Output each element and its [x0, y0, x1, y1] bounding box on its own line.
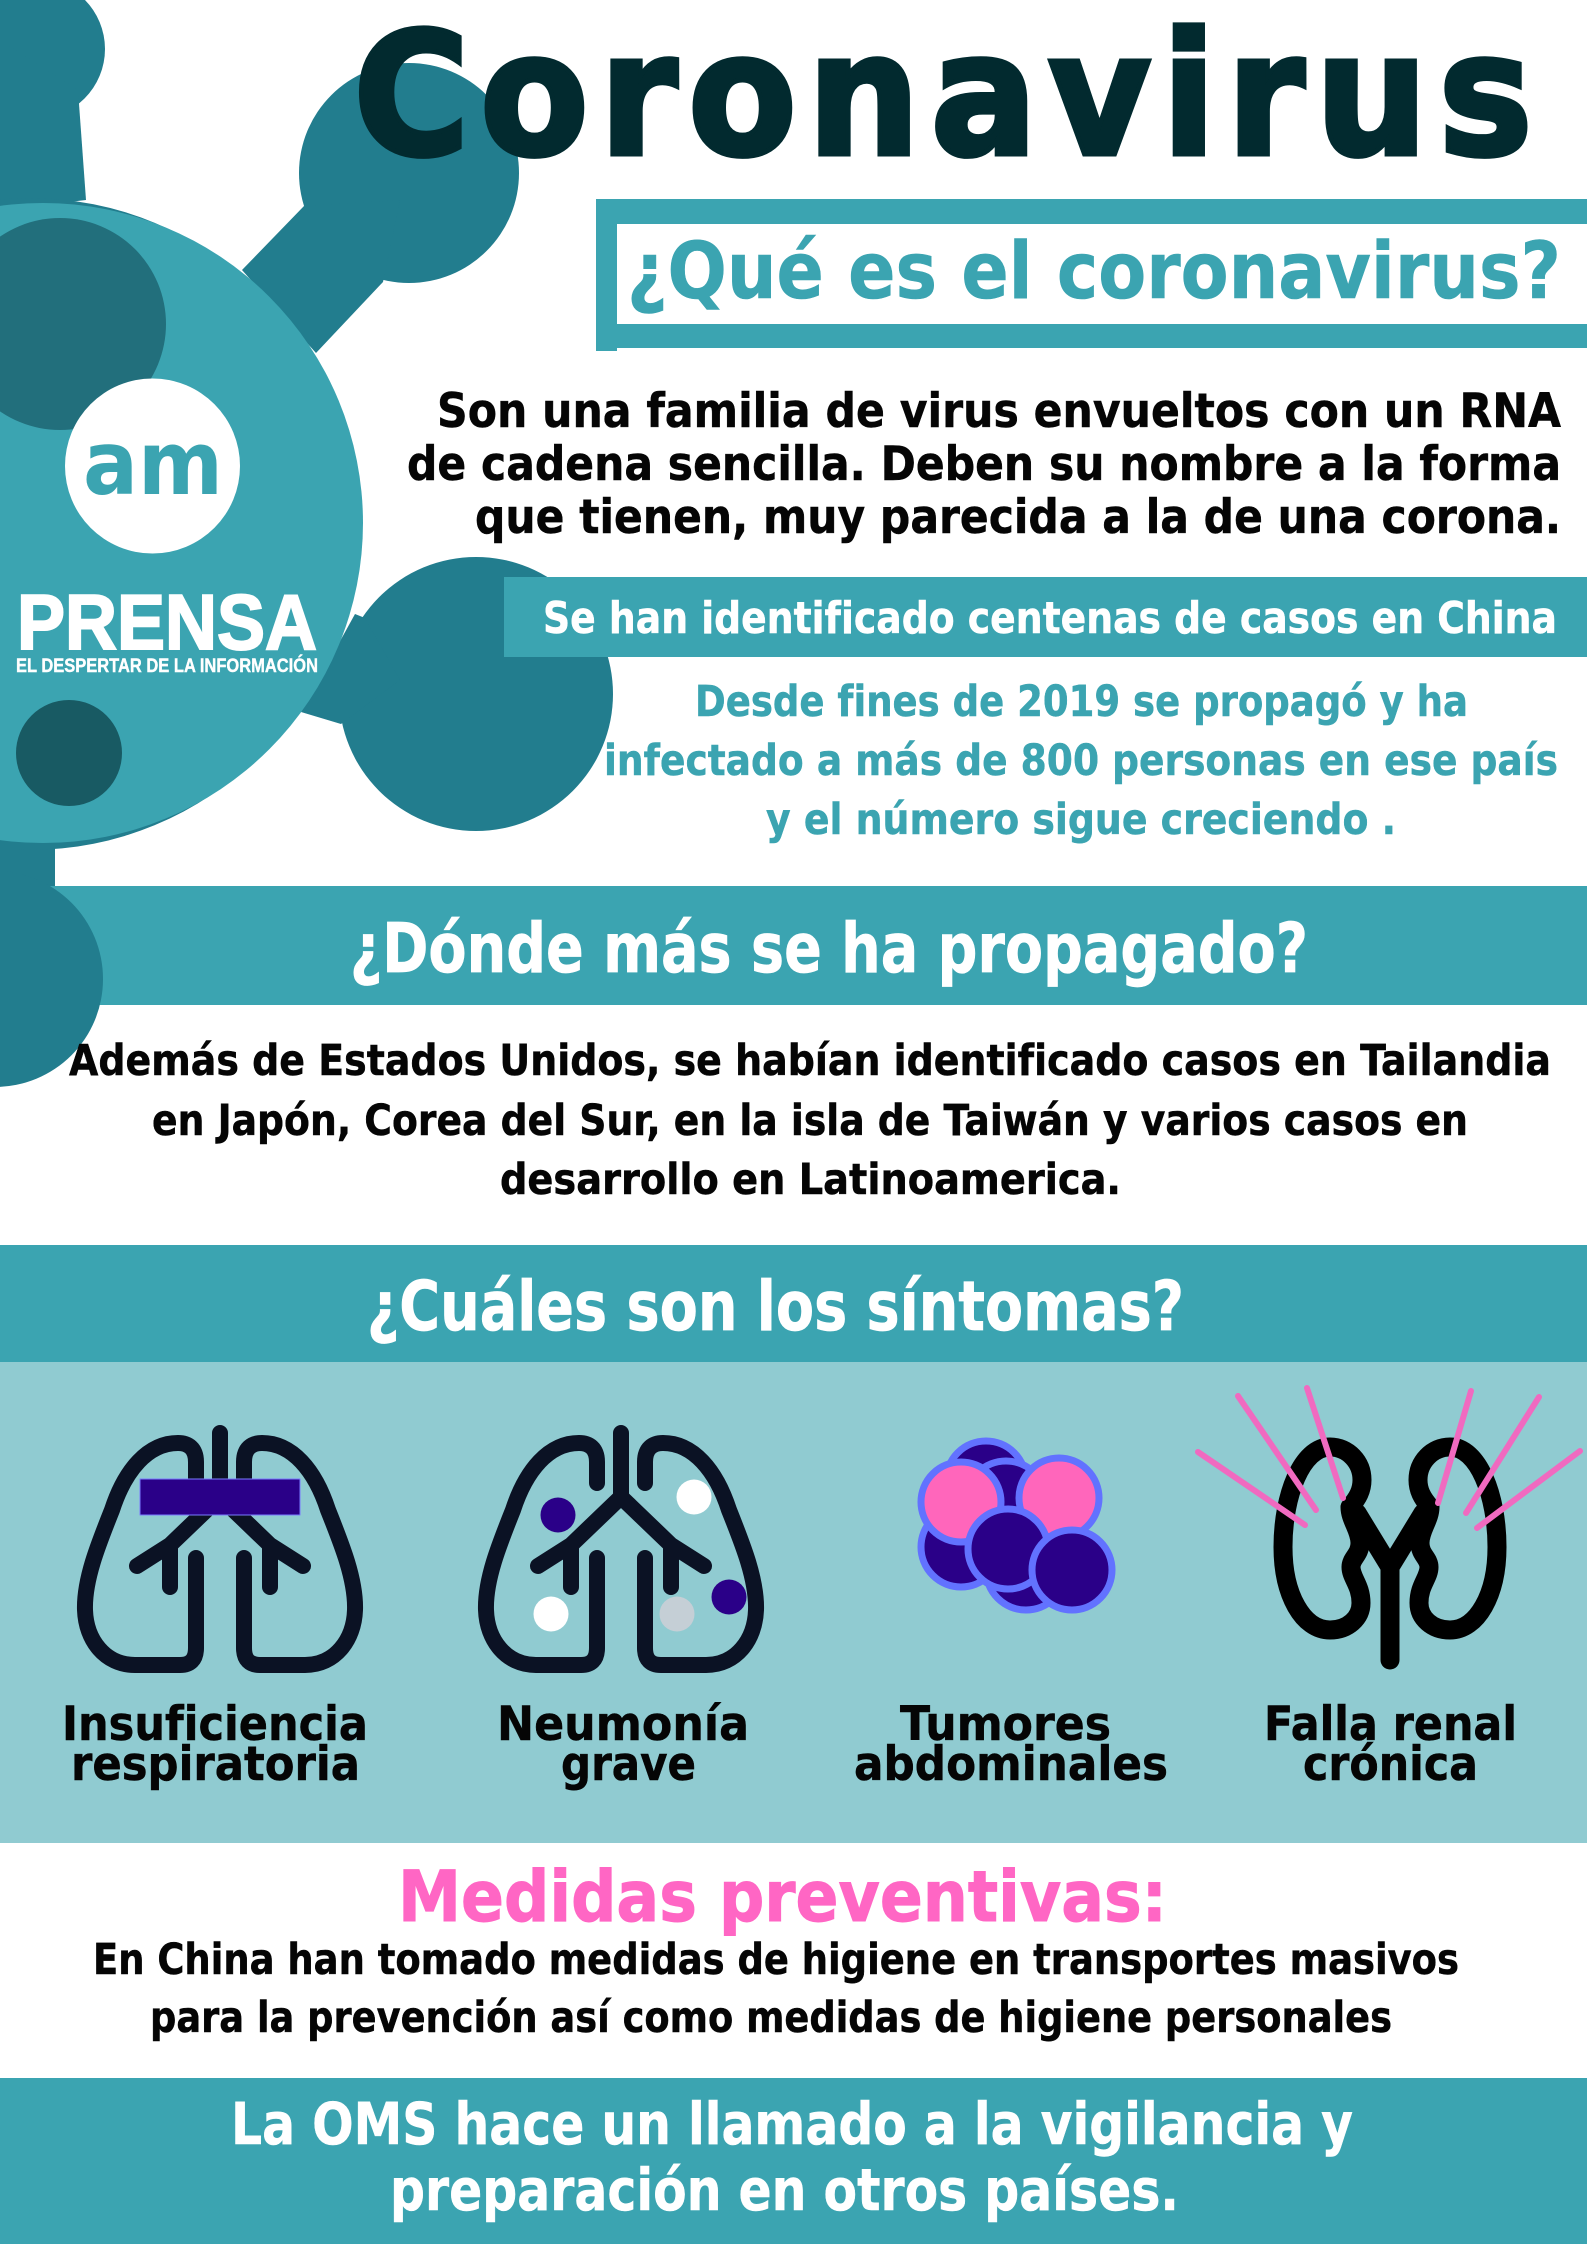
banner: where else	[0, 886, 1587, 1005]
banner: WHO call: preparación en otros países.	[390, 2156, 1179, 2224]
label: abdominal tumors: abdominales	[854, 1737, 1168, 1792]
virus arm: bottom	[0, 840, 55, 900]
icon: lungs with spots	[486, 1433, 756, 1665]
label: respiratory failure: respiratoria	[71, 1737, 360, 1792]
banner: symptoms heading: ¿Cuáles son los síntomas?	[367, 1267, 1184, 1347]
text block: spread in China	[604, 677, 1558, 845]
banner: symptoms heading	[0, 1245, 1587, 1362]
virus spot: large	[0, 218, 166, 430]
heading: preventive measures: Medidas preventivas:	[398, 1856, 1167, 1938]
text block: prevention: para la prevención así como medidas de higiene personales	[150, 1993, 1392, 2043]
label: chronic kidney failure: Falla renal	[1264, 1697, 1517, 1752]
label: abdominal tumors: Tumores	[900, 1697, 1111, 1752]
label: respiratory failure	[62, 1697, 368, 1792]
label: chronic kidney failure: crónica	[1303, 1737, 1478, 1792]
title: Coronavirus	[353, 0, 1533, 194]
heading box: what is coronavirus	[596, 199, 1587, 351]
banner: WHO call	[0, 2078, 1587, 2244]
virus body shadow	[0, 198, 356, 850]
label: respiratory failure: Insuficiencia	[62, 1697, 368, 1752]
banner: WHO call: La OMS hace un llamado a la vigilancia y	[231, 2090, 1353, 2158]
text block: other countries: desarrollo en Latinoamerica.	[500, 1155, 1121, 1205]
icon: tumor cells	[921, 1441, 1112, 1610]
virus arm: top	[0, 0, 105, 210]
virus arm: upper right	[242, 63, 519, 353]
text block: spread in China: Desde fines de 2019 se propagó y ha	[695, 677, 1468, 727]
label: chronic kidney failure	[1264, 1697, 1517, 1792]
banner: where else: ¿Dónde más se ha propagado?	[350, 909, 1308, 989]
label: severe pneumonia	[497, 1697, 749, 1792]
logo: PRENSA wordmark: PRENSA	[17, 578, 317, 666]
text block: spread in China: y el número sigue creciendo .	[766, 795, 1396, 845]
icon: lungs with blockage	[85, 1433, 355, 1665]
banner: cases in China	[504, 577, 1587, 657]
icon: kidneys	[1198, 1388, 1580, 1660]
virus arm: right	[301, 557, 613, 831]
text block: definition	[407, 384, 1562, 545]
logo: tagline: EL DESPERTAR DE LA INFORMACIÓN	[16, 655, 318, 677]
label: severe pneumonia: grave	[561, 1737, 696, 1792]
label: abdominal tumors	[854, 1697, 1168, 1792]
virus spot: small	[16, 700, 122, 806]
panel: symptoms	[0, 1362, 1587, 1843]
logo: am circle: am	[83, 412, 223, 515]
logo: am circle	[65, 378, 240, 554]
virus arm: bottom blob	[0, 871, 103, 1087]
virus body	[0, 203, 363, 843]
text block: prevention	[93, 1935, 1459, 2043]
text block: other countries	[69, 1036, 1551, 1205]
illustration: virus particle	[0, 0, 613, 900]
label: severe pneumonia: Neumonía	[497, 1697, 749, 1752]
